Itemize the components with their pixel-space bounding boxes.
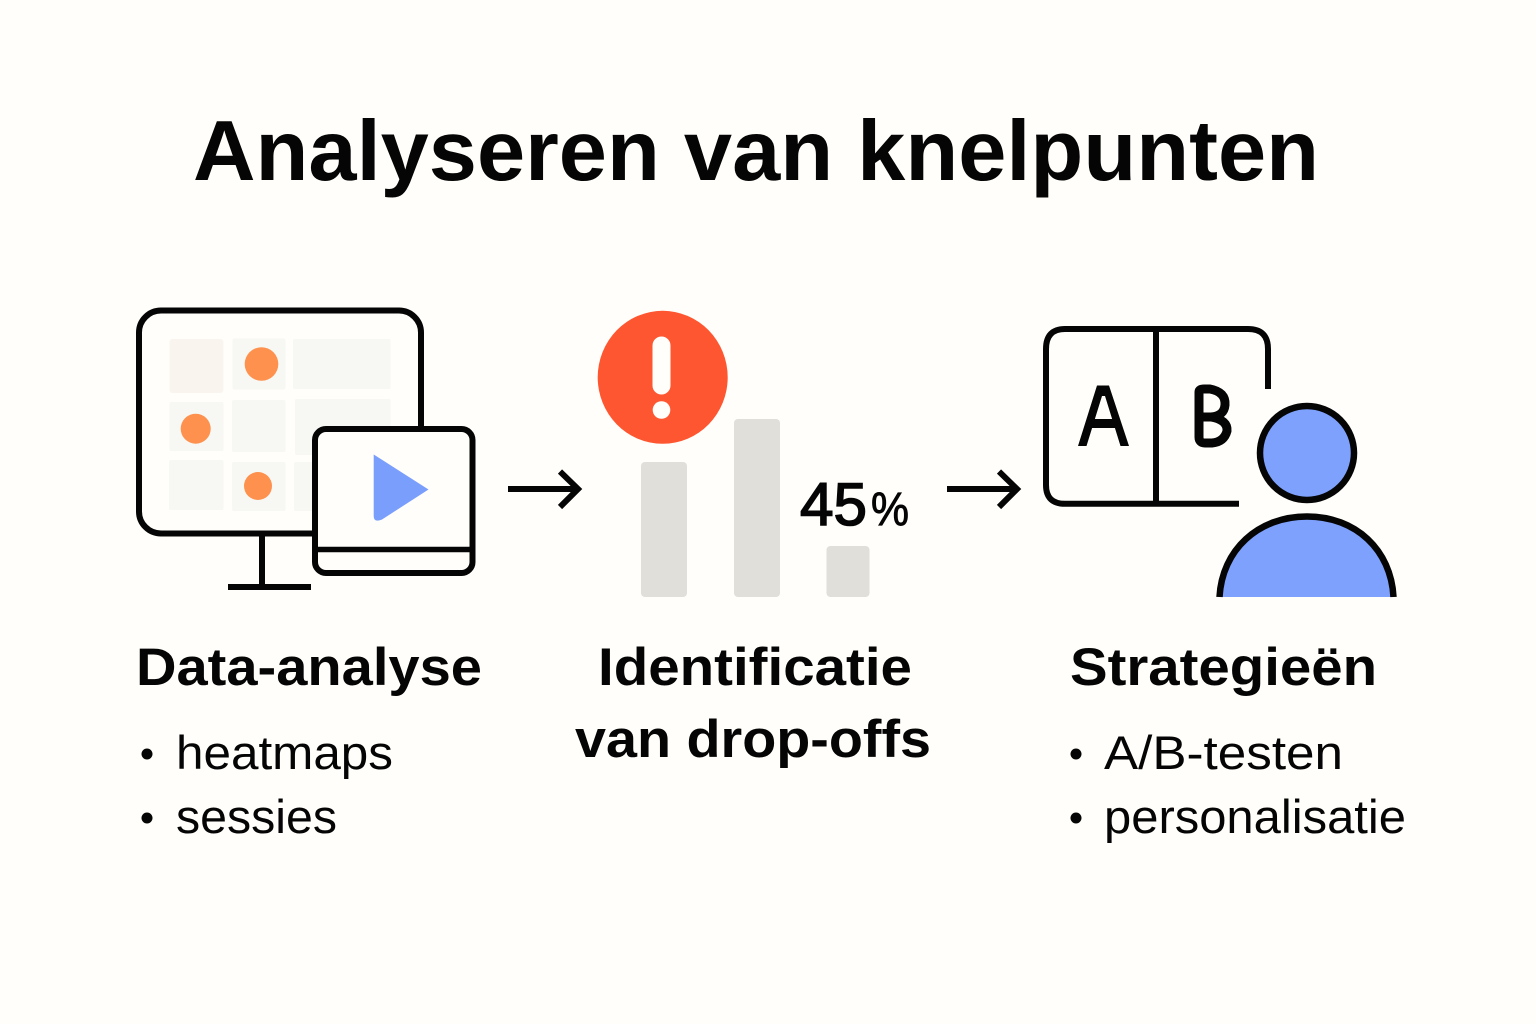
list: data analysis: heatmaps <box>176 726 393 779</box>
video window <box>315 429 472 573</box>
icon: A/B test and person <box>1046 329 1394 597</box>
list: strategies: personalisatie <box>1104 790 1406 843</box>
list: data analysis <box>142 726 393 843</box>
letter B <box>1199 389 1227 443</box>
monitor stand <box>228 536 311 587</box>
title: Analyseren van knelpunten <box>193 104 1319 199</box>
monitor frame <box>139 310 421 534</box>
heading: Identificatie van drop-offs: Identificatie <box>598 638 912 697</box>
heading: Identificatie van drop-offs <box>575 638 931 769</box>
value label: % <box>871 482 909 535</box>
list: strategies: A/B-testen <box>1104 726 1343 779</box>
split divider <box>1153 329 1159 504</box>
heatmap grid <box>169 338 390 511</box>
value label <box>800 471 909 538</box>
heatmap dots <box>181 347 278 500</box>
video bar <box>315 547 472 552</box>
bars <box>641 419 870 597</box>
person body <box>1220 516 1394 597</box>
heading: Data-analyse: Data-analyse <box>136 638 482 697</box>
person head <box>1260 406 1354 500</box>
bar chart with alert <box>598 311 909 597</box>
heading: Strategieën: Strategieën <box>1070 638 1377 697</box>
split panel frame <box>1046 329 1268 504</box>
arrow 1 <box>508 472 578 507</box>
icon: monitor with heatmap and video <box>139 310 472 587</box>
play triangle <box>374 454 428 521</box>
icon: alert <box>598 311 728 444</box>
letter A <box>1078 386 1129 446</box>
arrow 2 <box>947 472 1017 507</box>
heading: Identificatie van drop-offs: van drop-offs <box>575 710 931 769</box>
list: strategies <box>1070 726 1406 843</box>
value label: 45 <box>800 471 867 538</box>
list: data analysis: sessies <box>176 790 337 843</box>
